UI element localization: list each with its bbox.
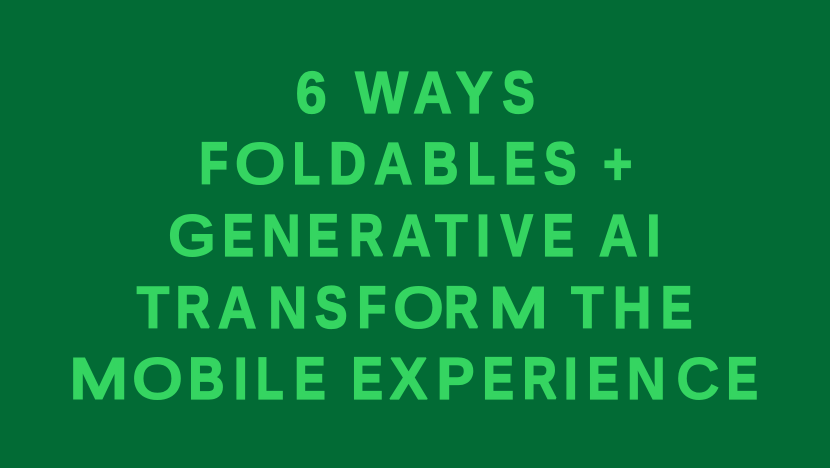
title line 3: E [223, 203, 254, 269]
title line 1: 6 [296, 60, 327, 126]
title line 4: F [358, 275, 386, 341]
title line 4: R [176, 276, 210, 340]
title line 3: A [392, 204, 431, 270]
title line 5 [69, 345, 758, 413]
title line 3: E [543, 203, 574, 269]
title line 5: N [627, 347, 666, 413]
title line 5: B [189, 347, 224, 411]
title line 3: A [599, 204, 638, 270]
title line 3: T [435, 202, 468, 269]
title line 3: R [349, 204, 383, 268]
title line 3: N [262, 204, 301, 270]
title line 1: Y [455, 60, 493, 126]
title line 5: E [588, 346, 619, 412]
title line 4: H [613, 274, 651, 341]
title [69, 60, 758, 413]
title line 1 [296, 60, 535, 127]
title line 2: E [504, 131, 535, 197]
title line 5: P [436, 346, 475, 412]
title line 5: O [133, 346, 182, 410]
title line 2 [200, 130, 632, 198]
title line 3: E [308, 203, 339, 269]
title line 4: R [444, 276, 478, 340]
title line 5: R [523, 347, 557, 411]
title line 5: M [69, 347, 128, 410]
title line 2: D [329, 131, 366, 196]
title line 4: T [571, 274, 604, 341]
title line 4: O [394, 275, 443, 339]
title line 1: A [413, 61, 452, 127]
title line 2: S [544, 132, 576, 196]
title line 3: G [168, 205, 215, 268]
title line 2: O [235, 131, 285, 195]
title line 5: I [564, 345, 578, 412]
title line 4: N [268, 276, 307, 342]
title line 2: L [468, 131, 495, 196]
title line 5: L [256, 346, 283, 411]
title line 4: A [218, 276, 257, 342]
title line 1: W [355, 60, 408, 126]
title line 5: I [234, 345, 248, 412]
title line 4: M [489, 276, 548, 339]
title line 5: E [727, 346, 758, 412]
title line 4: S [315, 276, 347, 340]
title line 2: B [423, 132, 458, 196]
title line 5: C [677, 348, 719, 411]
title line 5: X [390, 346, 428, 412]
title line 5: E [294, 346, 325, 412]
title line 2: L [293, 131, 320, 196]
title line 2: A [374, 132, 413, 198]
title line 5: E [352, 346, 383, 412]
title line 4: T [137, 274, 169, 341]
title line 2: F [200, 131, 228, 197]
title line 2: + [603, 130, 632, 197]
title line 4 [137, 274, 692, 342]
title line 4: E [661, 275, 692, 341]
title line 1: S [503, 61, 535, 125]
title line 3 [168, 202, 661, 270]
title line 3: V [501, 204, 533, 268]
title line 3: I [646, 202, 661, 269]
title line 3: I [476, 202, 490, 269]
title line 5: E [483, 346, 514, 412]
